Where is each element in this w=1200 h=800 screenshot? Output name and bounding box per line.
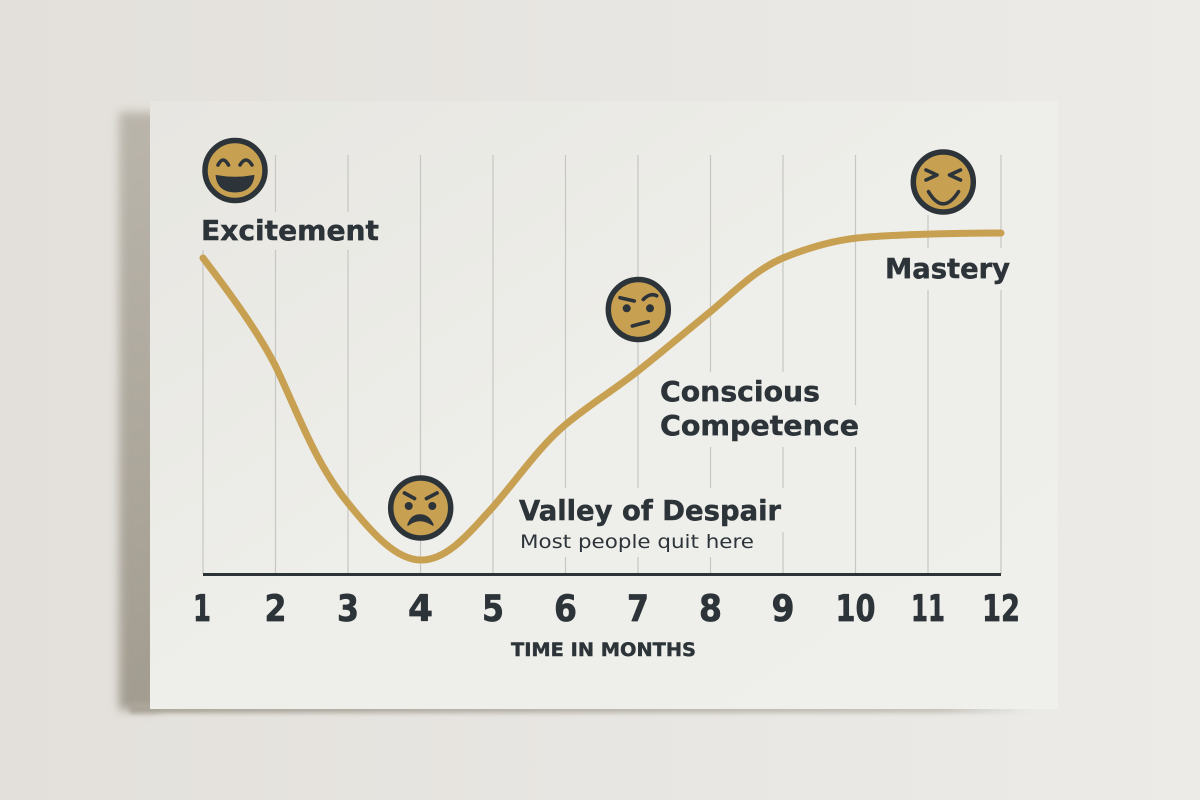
label: Conscious Competence bbox=[660, 375, 859, 442]
label: Mastery: Mastery bbox=[885, 252, 1010, 285]
x axis numbers: 6 bbox=[554, 587, 577, 630]
x axis numbers: 12 bbox=[982, 587, 1020, 630]
x axis numbers: 9 bbox=[772, 587, 794, 630]
x axis numbers: 4 bbox=[408, 587, 433, 630]
x axis numbers: 11 bbox=[911, 587, 945, 630]
caption: quit note: Most people quit here bbox=[520, 531, 754, 553]
icon: excited face bbox=[205, 140, 265, 200]
x axis numbers: 1 bbox=[193, 587, 211, 630]
icon: skeptical face bbox=[608, 280, 668, 340]
label: Conscious Competence: Conscious bbox=[660, 375, 820, 408]
x axis numbers: 3 bbox=[337, 587, 359, 630]
label: Excitement: Excitement bbox=[201, 214, 379, 247]
x axis numbers: 7 bbox=[627, 587, 649, 630]
label: Conscious Competence: Competence bbox=[660, 409, 859, 442]
panel: chart board bbox=[150, 101, 1058, 709]
x axis numbers: 8 bbox=[699, 587, 722, 630]
x axis numbers: 5 bbox=[482, 587, 504, 630]
x axis numbers: 2 bbox=[264, 587, 286, 630]
label: Valley of Despair bbox=[519, 494, 781, 553]
x axis numbers: 10 bbox=[836, 587, 876, 630]
x axis title: TIME IN MONTHS bbox=[511, 639, 696, 661]
x axis line bbox=[203, 573, 1001, 576]
x axis numbers bbox=[193, 587, 1020, 630]
icon: angry face bbox=[391, 478, 451, 538]
learning curve bbox=[203, 233, 1001, 560]
icon: delighted face bbox=[913, 152, 973, 212]
panel shadow bbox=[119, 112, 1030, 713]
vertical grid lines bbox=[203, 155, 1001, 574]
label: Valley of Despair: Valley of Despair bbox=[519, 494, 781, 527]
